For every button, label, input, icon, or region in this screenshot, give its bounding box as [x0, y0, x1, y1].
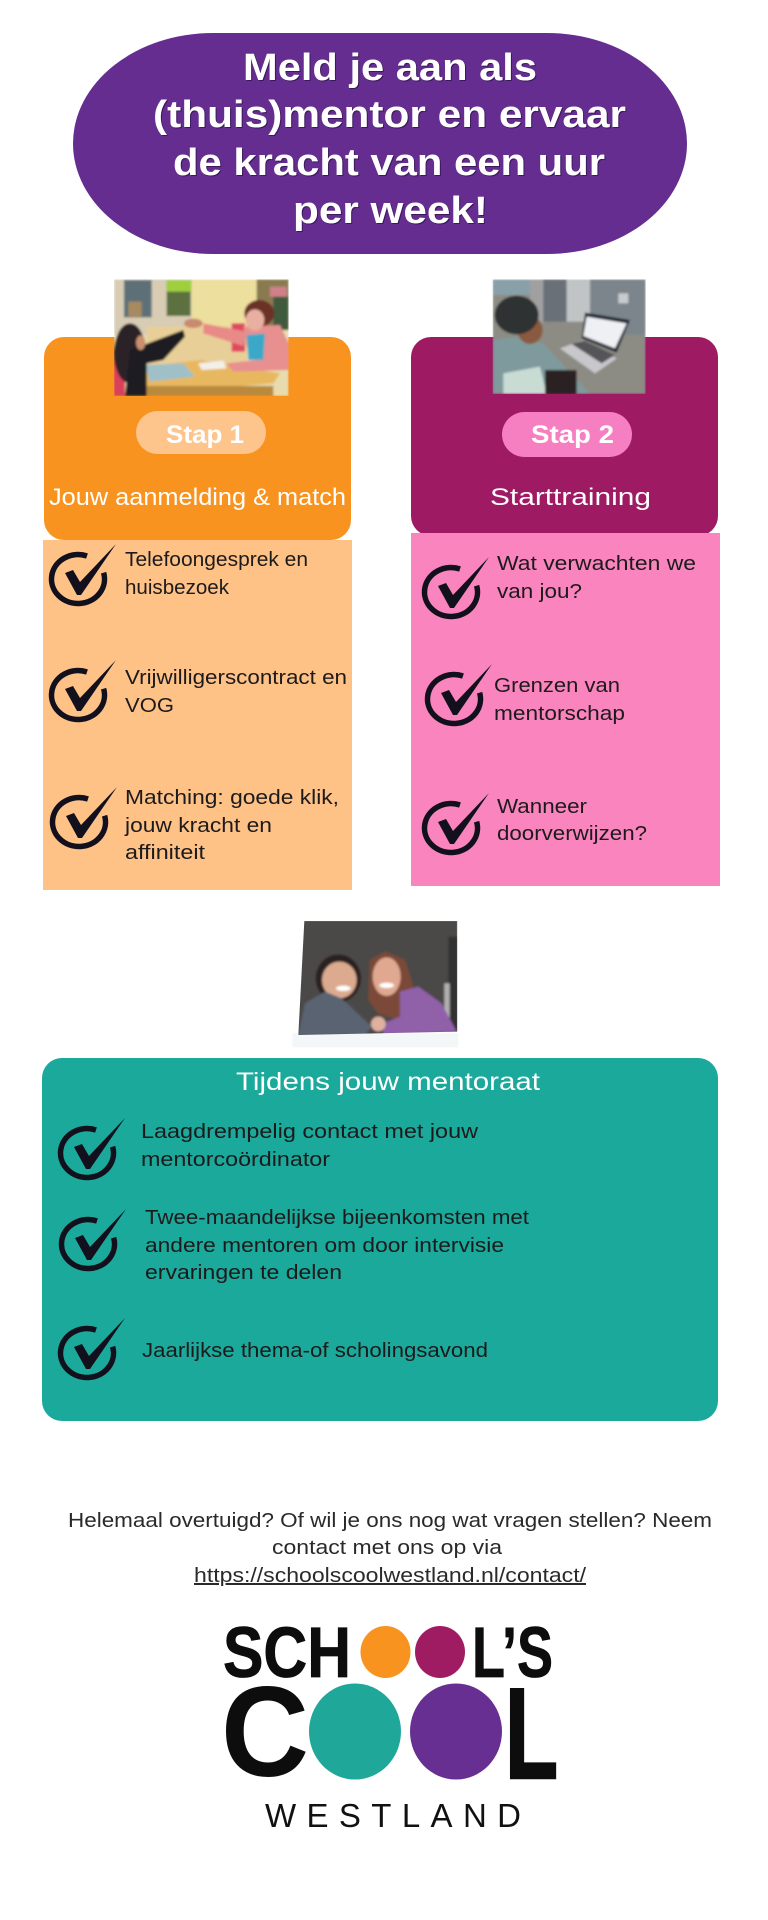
step heading: Starttraining: [490, 484, 651, 511]
check item: doorverwijzen: doorverwijzen?: [497, 823, 647, 845]
check item: bijeenkomsten: [62, 1207, 529, 1284]
check item: scholingsavond: [61, 1318, 488, 1378]
photo: mentor and child at a table: [114, 279, 289, 396]
check item: bijeenkomsten: andere mentoren om door intervisie: [145, 1235, 504, 1257]
title text: (thuis)mentor en ervaar: [153, 94, 626, 136]
title text: de kracht van een uur: [173, 142, 605, 184]
check item: matching: affiniteit: [125, 842, 206, 864]
panel heading: Tijdens jouw mentoraat: [236, 1068, 540, 1096]
step badge: [136, 411, 266, 454]
logo: School's Cool Westland: C: [221, 1661, 309, 1804]
photo: boy at a laptop: [493, 279, 646, 394]
check item: verwachtingen: van jou?: [497, 581, 582, 603]
title banner: [73, 33, 687, 254]
check item: telefoongesprek: Telefoongesprek en: [125, 549, 308, 571]
title text: [153, 47, 626, 232]
contact text: https://schoolscoolwestland.nl/contact/: [194, 1565, 587, 1587]
check item: doorverwijzen: Wanneer: [497, 796, 587, 818]
check item: matching: Matching: goede klik,: [125, 787, 339, 809]
panel: stap 2: [411, 279, 720, 886]
check item: bijeenkomsten: ervaringen te delen: [145, 1262, 342, 1284]
check item: vrijwilligerscontract: VOG: [125, 695, 174, 717]
check item: matching: jouw kracht en: [124, 815, 272, 837]
panel: stap 1: [43, 279, 352, 890]
checklist panel: [411, 533, 720, 886]
check item: vrijwilligerscontract: Vrijwilligerscontract en: [125, 667, 347, 689]
check item: telefoongesprek: [52, 544, 308, 604]
title text: Meld je aan als: [243, 47, 537, 89]
step heading: Jouw aanmelding & match: [49, 484, 346, 511]
panel: tijdens jouw mentoraat: [42, 1058, 718, 1421]
check item: verwachtingen: Wat verwachten we: [497, 553, 696, 575]
check item: contact: Laagdrempelig contact met jouw: [141, 1121, 479, 1143]
step badge: [502, 412, 632, 457]
check item: contact: mentorcoördinator: [141, 1149, 330, 1171]
logo: School's Cool Westland: WESTLAND: [265, 1797, 521, 1834]
teal card: [42, 1058, 718, 1421]
check item: contact: [61, 1118, 479, 1178]
orange header card: [44, 337, 351, 540]
logo: School's Cool Westland: SCH: [223, 1614, 351, 1693]
step badge: Stap 2: [531, 421, 614, 449]
photo: mentor and pupil smiling: [292, 920, 458, 1047]
contact text: [68, 1510, 712, 1587]
check item: scholingsavond: Jaarlijkse thema-of scholingsavond: [142, 1340, 488, 1362]
check item: matching: [53, 787, 339, 864]
logo: School's Cool Westland: [221, 1614, 558, 1834]
step badge: Stap 1: [166, 421, 244, 449]
title text: per week!: [293, 190, 488, 232]
logo: School's Cool Westland: L: [505, 1662, 558, 1806]
check item: vrijwilligerscontract: [52, 660, 347, 720]
check item: bijeenkomsten: Twee-maandelijkse bijeenkomsten met: [145, 1207, 529, 1229]
check item: grenzen: [428, 664, 625, 725]
check item: verwachtingen: [425, 553, 696, 617]
logo: School's Cool Westland: L’S: [472, 1614, 553, 1693]
checklist panel: [43, 540, 352, 890]
contact text: contact met ons op via: [272, 1537, 503, 1559]
check item: grenzen: mentorschap: [494, 703, 625, 725]
check item: grenzen: Grenzen van: [494, 675, 620, 697]
check item: doorverwijzen: [425, 793, 647, 853]
contact text: Helemaal overtuigd? Of wil je ons nog wat vragen stellen? Neem: [68, 1510, 712, 1532]
check item: telefoongesprek: huisbezoek: [125, 577, 230, 599]
plum header card: [411, 337, 718, 536]
